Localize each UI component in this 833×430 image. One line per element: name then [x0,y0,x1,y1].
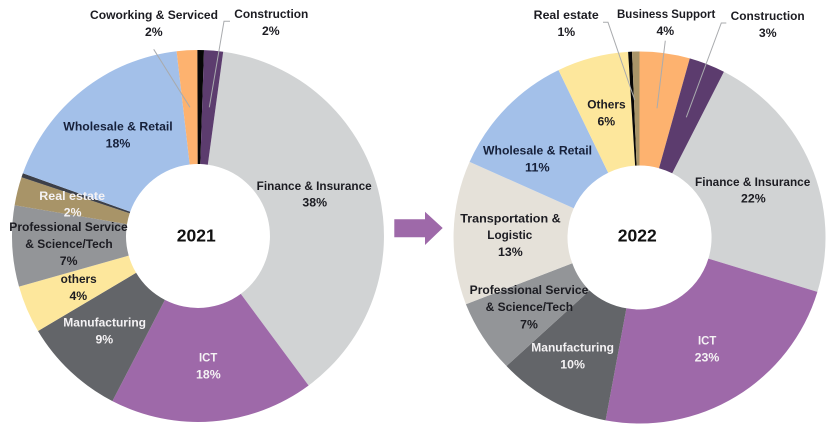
donut chart: 2021 [9,9,384,422]
label: Finance & Insurance: 38% [302,198,327,210]
label: Manufacturing [531,343,614,372]
slice: Transportation & Logistic 13% [454,162,574,304]
slice: Real estate 1% [632,51,640,166]
slice: black sector [197,50,204,164]
label: Professional Service & Science/Tech: & Science/Tech [486,302,573,314]
leader line: Business Support [657,41,665,108]
label: Coworking & Serviced: Coworking & Serviced [90,10,218,22]
label: Professional Service & Science/Tech: 7% [60,256,78,268]
label: Real estate: 2% [64,208,82,220]
label: Others [587,99,626,128]
label: Others: Others [587,99,626,111]
slice: Professional Service 7% [466,263,590,366]
label: Wholesale & Retail: 11% [525,163,550,175]
slice: Wholesale & Retail 11% [470,70,608,208]
label: Construction: Construction [731,11,805,23]
label: ICT: ICT [698,336,716,348]
label: Manufacturing: 10% [560,360,585,372]
label: Construction [234,9,308,38]
slice: Professional Service 7% [12,205,129,287]
leader line: Construction [209,21,230,107]
label: Professional Service & Science/Tech: Professional Service [9,222,128,234]
label: Wholesale & Retail: Wholesale & Retail [483,145,592,157]
label: Finance & Insurance: Finance & Insurance [257,181,372,193]
label: Finance & Insurance [257,181,372,210]
centre label: 2022: 2022 [618,226,657,246]
slice: Construction 2% [200,50,223,165]
label: Real estate [534,10,599,39]
label: Finance & Insurance: 22% [741,194,766,206]
label: Wholesale & Retail [63,122,173,151]
label: Transportation & Logistic: 13% [498,247,523,259]
label: Finance & Insurance: Finance & Insurance [695,177,810,189]
leader line: Coworking [154,49,190,107]
label: Manufacturing: 9% [96,335,113,347]
label: Manufacturing: Manufacturing [531,343,614,355]
label: ICT: ICT [199,353,217,365]
label: Business Support: 4% [656,26,674,38]
label: Construction: 3% [759,28,777,40]
slice: Business Support 4% [640,51,690,168]
slice: Finance & Insurance 38% [208,52,384,385]
label: Wholesale & Retail: Wholesale & Retail [63,122,173,134]
label: Professional Service & Science/Tech [9,222,128,268]
label: Business Support [617,9,715,38]
slice: Construction 3% [659,58,724,173]
label: Real estate [39,191,105,220]
slice: Manufacturing 9% [38,273,165,401]
label: Real estate: Real estate [534,10,599,22]
label: Real estate: 1% [558,27,575,39]
slice: Manufacturing 10% [506,290,626,420]
centre label: 2021: 2021 [177,226,216,246]
slice: Finance & Insurance 22% [672,72,826,292]
label: ICT [196,353,221,382]
label: Construction: Construction [234,9,308,21]
label: others: others [61,274,97,286]
label: Professional Service & Science/Tech: & Science/Tech [25,239,113,251]
slice: ICT 23% [606,259,817,424]
label: Coworking & Serviced [90,10,218,39]
label: Wholesale & Retail: 18% [106,139,130,151]
label: Wholesale & Retail [483,145,592,175]
slice: Real estate 2% [15,177,130,224]
slice: black sector [628,52,637,166]
label: Real estate: Real estate [39,191,105,203]
slice: Coworking & Serviced 2% [177,50,198,164]
slice: thin dark sector [22,173,130,213]
label: ICT: 18% [196,370,221,382]
slice: Wholesale & Retail 18% [23,51,190,212]
slice: Others 6% [558,52,635,173]
label: others [61,274,97,303]
label: Professional Service & Science/Tech: 7% [520,319,538,331]
slice: ICT 18% [112,294,309,422]
label: Professional Service & Science/Tech: Professional Service [470,285,588,297]
label: Coworking & Serviced: 2% [145,27,163,39]
arrow [394,212,443,245]
label: ICT [695,336,719,365]
slice: others 4% [19,256,136,331]
label: Professional Service & Science/Tech [470,285,588,331]
label: Transportation & Logistic: Transportation & [460,213,561,225]
label: Business Support: Business Support [617,9,715,21]
label: Transportation & Logistic: Logistic [487,230,533,242]
label: Transportation & Logistic [460,213,561,259]
label: Finance & Insurance [695,177,810,206]
label: Others: 6% [598,116,615,128]
label: Manufacturing: Manufacturing [63,318,146,330]
label: Construction [731,11,805,40]
label: Construction: 2% [262,26,280,38]
label: Manufacturing [63,318,146,347]
leader line: Construction [686,23,726,117]
label: others: 4% [70,291,87,303]
donut chart: 2022 [454,9,826,424]
label: ICT: 23% [695,353,719,365]
leader line: Real estate [603,22,635,100]
